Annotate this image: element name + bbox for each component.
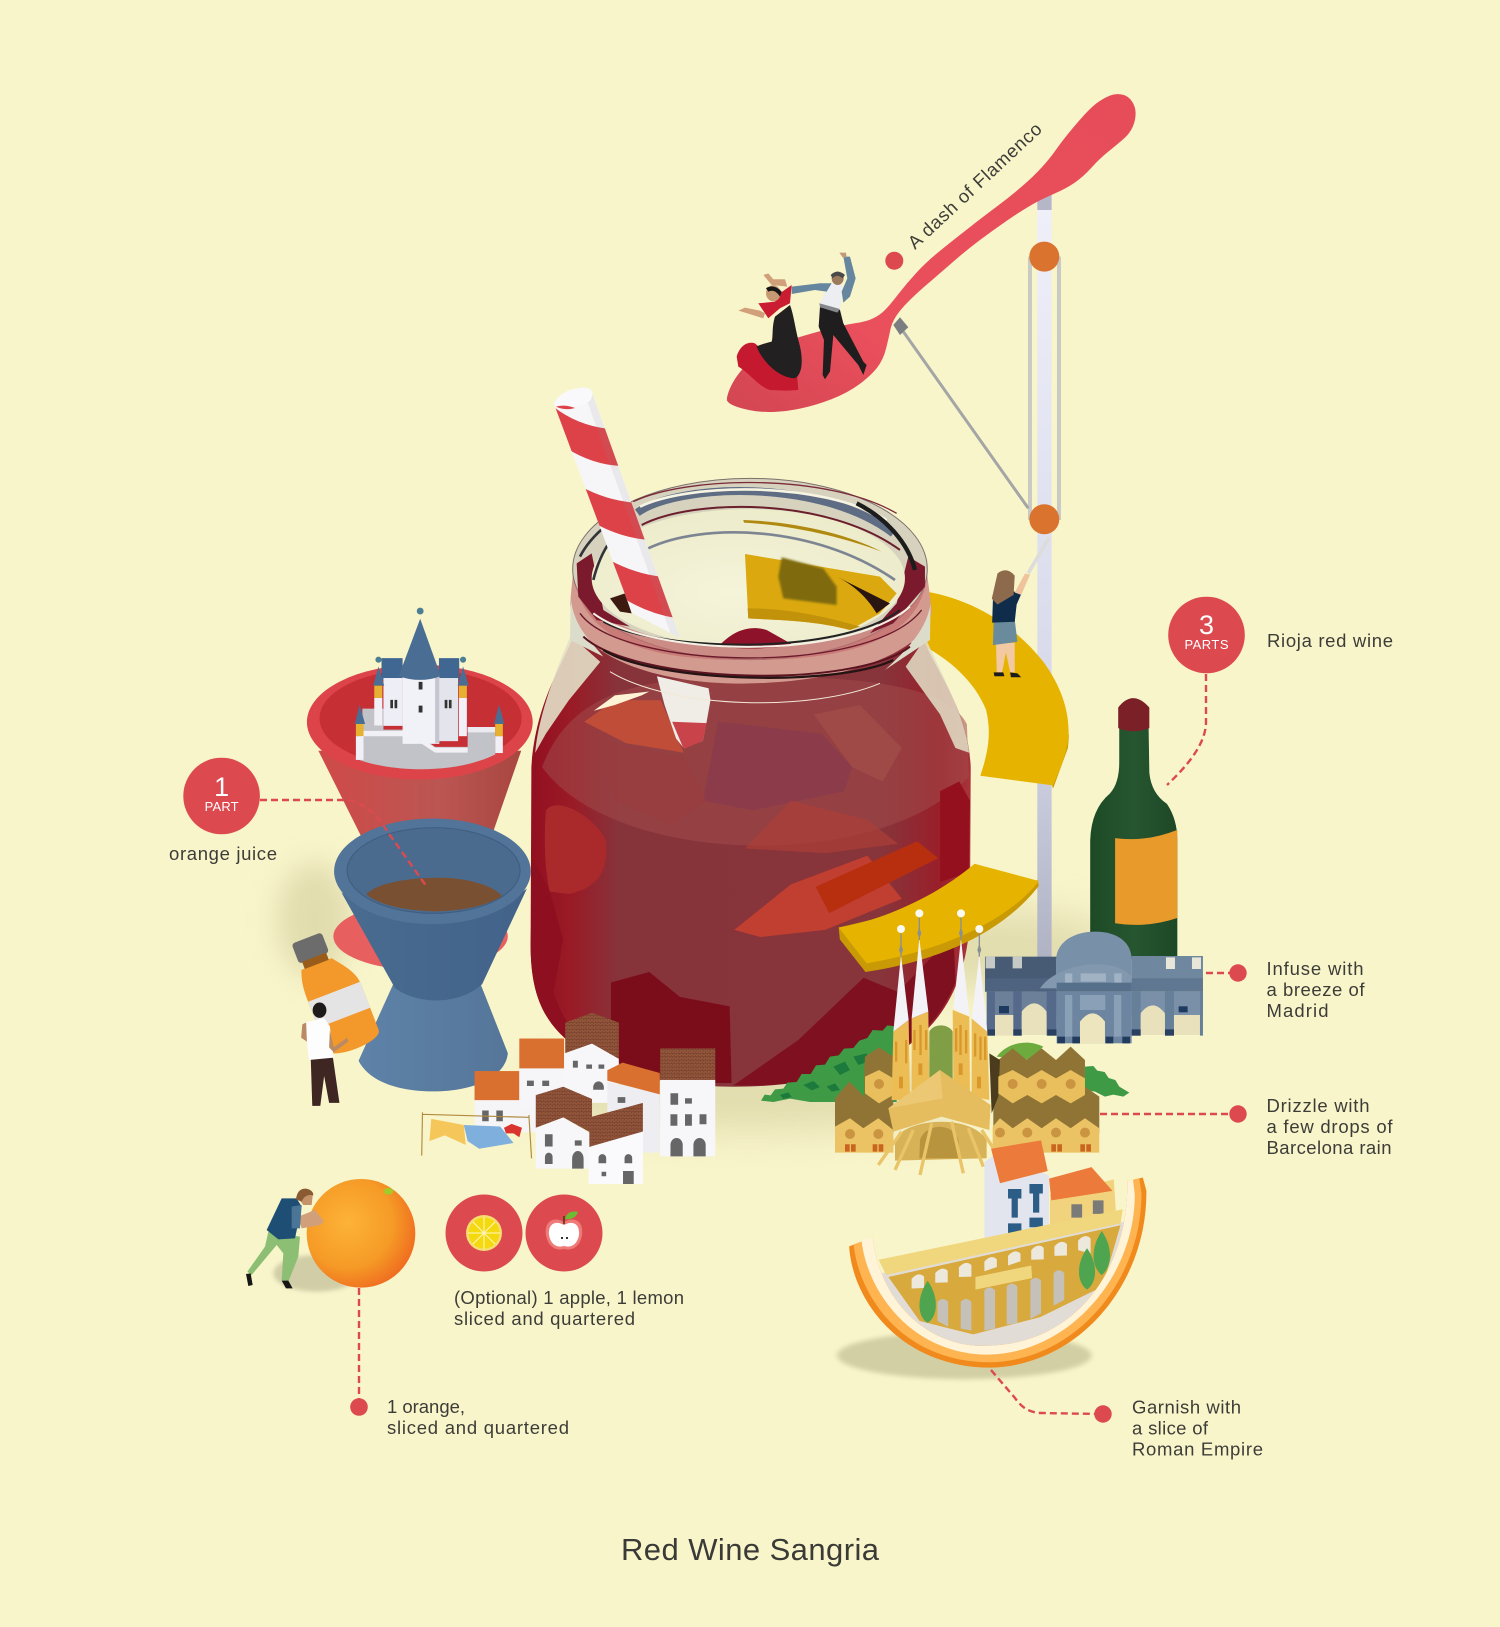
right wing brown xyxy=(993,1047,1099,1133)
tall house roof xyxy=(991,1140,1048,1183)
text: sliced and quartered xyxy=(387,1417,569,1438)
marker xyxy=(1094,1405,1112,1423)
soft ground shadows xyxy=(277,862,1120,1131)
yellow reflection xyxy=(745,554,897,630)
garnish callout xyxy=(991,1370,1263,1460)
right trees xyxy=(1079,1231,1110,1290)
top xyxy=(992,591,1021,623)
jigger base flare xyxy=(333,903,508,970)
jigger cone xyxy=(318,751,521,850)
aqueduct body xyxy=(888,1225,1121,1334)
fruit chunk xyxy=(596,738,707,825)
rim inner xyxy=(347,828,520,913)
portal dark xyxy=(919,1127,960,1158)
drizzle callout xyxy=(1100,1095,1393,1158)
apple leaf xyxy=(565,1212,578,1219)
sleeve xyxy=(292,1205,302,1228)
orange slice peel xyxy=(594,692,649,711)
glass shoulder reflection left xyxy=(535,636,600,753)
left pillar feet xyxy=(987,1029,1057,1036)
house front right body xyxy=(589,1132,643,1184)
top lip outer xyxy=(573,478,927,660)
icon disc xyxy=(526,1194,602,1272)
rim grey line xyxy=(648,532,895,580)
yellow house xyxy=(1050,1179,1116,1229)
mouth lower edge dark xyxy=(603,610,900,645)
number: 3 xyxy=(1199,610,1214,640)
rim dark red line xyxy=(642,507,900,550)
castle xyxy=(355,608,504,769)
orange slice floating xyxy=(584,700,684,753)
3 parts connector xyxy=(1167,674,1206,785)
orange juice label: orange juice xyxy=(169,843,277,864)
towers xyxy=(892,1010,989,1100)
man legs xyxy=(311,1058,339,1106)
rim outline top xyxy=(633,483,897,513)
bottle glass xyxy=(1090,700,1177,960)
left bush xyxy=(761,1025,897,1102)
roof back xyxy=(519,1039,564,1068)
right wing band xyxy=(1132,978,1203,992)
unit: PART xyxy=(205,799,239,814)
shoulder highlight xyxy=(610,672,880,703)
pith xyxy=(862,1180,1135,1355)
house far left xyxy=(475,1100,538,1132)
orange callout xyxy=(350,1288,569,1438)
dark reflection xyxy=(837,577,890,613)
lip front pink band xyxy=(575,583,926,660)
spire stems xyxy=(899,917,981,957)
striped straw xyxy=(554,388,680,638)
tall blue house xyxy=(984,1153,1049,1239)
rim outer xyxy=(334,818,531,924)
left pillars xyxy=(987,992,1057,1036)
label: 1 part xyxy=(183,758,260,834)
straw white body xyxy=(554,394,680,638)
man torso xyxy=(267,1198,302,1239)
legs xyxy=(996,643,1015,672)
text: Barcelona rain xyxy=(1266,1137,1392,1158)
liquid upper tint xyxy=(542,676,969,846)
dome front arch xyxy=(1040,964,1132,988)
left wing crenels xyxy=(986,957,1022,968)
right upper gold band xyxy=(998,1070,1085,1103)
house mid roof xyxy=(607,1063,660,1094)
icon disc xyxy=(446,1194,522,1272)
left dark chunk xyxy=(531,858,615,1069)
center cornice xyxy=(1057,983,1132,992)
title: Red Wine Sangria xyxy=(621,1532,880,1567)
windows xyxy=(482,1061,706,1184)
badge xyxy=(1168,597,1245,673)
sagrada familia xyxy=(761,909,1129,1175)
man arm xyxy=(298,1210,324,1228)
strut clamp xyxy=(893,317,908,335)
center arch xyxy=(1080,1013,1105,1043)
center strips xyxy=(1065,995,1121,1037)
right dark gap xyxy=(989,1053,1000,1113)
woman with pole stick on the ring xyxy=(992,537,1049,677)
house tile tall roof xyxy=(565,1013,619,1059)
lower ridge dark line xyxy=(583,637,910,676)
number: 1 xyxy=(214,772,229,802)
man head xyxy=(313,1003,326,1018)
text: a breeze of xyxy=(1266,979,1365,1000)
spoon with flamenco dancers xyxy=(727,94,1136,412)
flamenco label: A dash of Flamenco xyxy=(903,118,1046,253)
right pillars xyxy=(1132,992,1203,1036)
yellow house roof xyxy=(1049,1167,1112,1200)
orange stem xyxy=(383,1188,393,1195)
apple flesh xyxy=(549,1223,579,1247)
connector xyxy=(358,1288,360,1400)
lower groove xyxy=(603,650,893,678)
text: a few drops of xyxy=(1266,1116,1393,1137)
man arm xyxy=(301,1022,348,1052)
orange wedge xyxy=(734,856,902,937)
gold thin reflection xyxy=(743,520,882,552)
center block xyxy=(1057,992,1132,1043)
main pole upper xyxy=(1037,193,1052,1007)
left wing top xyxy=(985,957,1057,992)
juice bottle xyxy=(287,926,382,1059)
facade top facet xyxy=(888,1070,943,1108)
left lip reflection xyxy=(577,553,630,627)
man hair xyxy=(296,1189,313,1202)
wing windows xyxy=(845,1144,1091,1152)
yellow house windows xyxy=(1071,1200,1104,1218)
facade xyxy=(888,1070,991,1132)
lemon flesh xyxy=(468,1218,500,1248)
apple icon xyxy=(526,1194,602,1272)
lemon segments xyxy=(468,1217,500,1249)
house front left body xyxy=(536,1117,590,1169)
apple stem xyxy=(563,1216,565,1224)
glass shoulder reflection right xyxy=(906,638,969,753)
left upper band xyxy=(865,1070,893,1103)
lower ridge light xyxy=(570,597,931,670)
right pillar feet xyxy=(1132,1029,1174,1036)
interior ground xyxy=(882,1221,1125,1347)
slice shadow xyxy=(837,1332,1091,1379)
juice xyxy=(366,878,502,911)
side rails xyxy=(1028,257,1061,520)
aqueduct mid beam xyxy=(975,1265,1032,1290)
orange and pushing person xyxy=(246,1179,415,1292)
upper cone xyxy=(341,889,527,1000)
dark patch xyxy=(778,557,837,605)
left lower wing brown xyxy=(835,1047,893,1133)
connector xyxy=(991,1370,1098,1414)
apple skin xyxy=(546,1220,582,1249)
white village xyxy=(422,1013,715,1184)
straw opening xyxy=(554,388,592,407)
strut xyxy=(903,332,1028,508)
text: Infuse with xyxy=(1266,958,1364,979)
spires xyxy=(893,938,987,1032)
left rim stripes xyxy=(580,525,610,580)
rioja label: Rioja red wine xyxy=(1267,630,1393,651)
text: a slice of xyxy=(1132,1418,1209,1438)
right window xyxy=(1179,1006,1188,1012)
bottle label xyxy=(1115,830,1177,925)
house front left roof xyxy=(536,1087,592,1133)
man dancer xyxy=(792,253,867,379)
lemon icon xyxy=(446,1194,522,1272)
arm xyxy=(1015,573,1030,595)
text: Madrid xyxy=(1266,1000,1328,1021)
right wing openings xyxy=(1141,1005,1200,1035)
tower stripes xyxy=(895,1025,986,1088)
house right body xyxy=(660,1080,715,1156)
marker xyxy=(350,1398,368,1416)
optional fruit label: (Optional) 1 apple, 1 lemon xyxy=(454,1287,684,1308)
green tower xyxy=(929,1025,953,1080)
left wing band xyxy=(985,978,1057,992)
glass jar of sangria xyxy=(531,380,971,1087)
house tile tall body xyxy=(564,1043,619,1103)
left wing lower infill xyxy=(995,992,1057,1015)
label: 3 parts xyxy=(1168,597,1245,673)
house mid body xyxy=(607,1082,660,1153)
ring seen through glass xyxy=(816,841,938,913)
left window xyxy=(999,1006,1009,1013)
stick xyxy=(1028,537,1049,573)
left lower gold xyxy=(835,1118,893,1153)
rim dark right xyxy=(857,503,915,570)
spire tips xyxy=(897,909,983,933)
aqueduct top beam xyxy=(879,1209,1123,1275)
top right bush xyxy=(997,1043,1043,1060)
marker xyxy=(1229,964,1247,982)
right side shading xyxy=(585,392,680,638)
shoes xyxy=(994,672,1021,677)
attic windows xyxy=(1065,973,1122,983)
roman orange slice xyxy=(837,1140,1146,1379)
man shoes xyxy=(246,1273,293,1288)
woman dancer xyxy=(737,273,802,391)
house front right roof xyxy=(589,1103,643,1147)
straw stripes group xyxy=(554,394,680,638)
fruit chunk xyxy=(814,705,902,782)
left inner dark reflection xyxy=(610,593,632,613)
yellow reflection edge xyxy=(748,608,860,630)
optional fruit label: sliced and quartered xyxy=(454,1308,635,1329)
front rim groove lines xyxy=(580,607,922,703)
lower ridge xyxy=(570,570,932,684)
red bit in opening xyxy=(556,406,575,409)
skirt xyxy=(993,620,1017,645)
hair xyxy=(992,570,1015,604)
text: Drizzle with xyxy=(1266,1095,1370,1116)
jar body and contents xyxy=(531,636,971,1087)
infuse callout xyxy=(1206,958,1365,1021)
yellow ring lower arc xyxy=(839,864,1039,972)
flamenco marker xyxy=(885,252,903,270)
jar neck lower lip xyxy=(570,478,932,684)
spoon xyxy=(727,94,1136,412)
house back xyxy=(519,1068,565,1107)
pole shadow under spoon xyxy=(1037,195,1052,210)
rim top band xyxy=(637,491,893,533)
ice chunk xyxy=(703,722,852,810)
right dark chunk xyxy=(940,782,970,882)
connector xyxy=(1100,1113,1232,1115)
text: Garnish with xyxy=(1132,1396,1241,1418)
dome xyxy=(1056,932,1132,987)
lip bottom line xyxy=(580,610,922,658)
lower cone xyxy=(359,980,508,1091)
submerged roofs xyxy=(611,972,732,1083)
portal dome xyxy=(895,1122,987,1161)
cherry xyxy=(718,628,793,648)
left bush shade xyxy=(780,1053,868,1099)
straw refracted through glass xyxy=(657,676,710,748)
mouth floor xyxy=(592,509,905,648)
wine bottle xyxy=(1090,698,1177,960)
apple seeds xyxy=(561,1237,568,1239)
right bush xyxy=(1085,1066,1129,1097)
red stripes xyxy=(553,407,677,618)
clothes line xyxy=(422,1112,532,1158)
tall house windows xyxy=(1008,1184,1043,1233)
unit: PARTS xyxy=(1184,637,1229,652)
right wing top xyxy=(1132,956,1203,991)
yellow ring upper arc xyxy=(917,590,1069,789)
person carrying juice bottle xyxy=(287,926,382,1106)
straw red lower part xyxy=(672,722,707,749)
right lip reflection xyxy=(870,557,925,633)
ring edge xyxy=(1051,734,1069,789)
1 part dashed connector xyxy=(260,800,427,887)
upper pivot xyxy=(1029,242,1059,272)
bottom dark zone xyxy=(733,935,955,1086)
ring top xyxy=(839,864,1039,963)
columns xyxy=(878,1122,993,1175)
ring edge xyxy=(839,880,1039,972)
blue jigger with juice xyxy=(334,818,531,1091)
man legs xyxy=(247,1232,300,1282)
rim outer xyxy=(307,665,533,779)
man head xyxy=(297,1189,313,1205)
bottle capsule xyxy=(1118,698,1149,731)
roof far left xyxy=(475,1071,519,1100)
peel light xyxy=(854,1178,1141,1362)
puerta de alcala gate xyxy=(985,932,1203,1043)
red jigger with castle xyxy=(307,608,533,970)
marker xyxy=(1229,1105,1247,1123)
left apple piece xyxy=(545,805,606,894)
man shirt xyxy=(305,1018,334,1060)
badge xyxy=(183,758,260,834)
text: 1 orange, xyxy=(387,1396,465,1417)
peel xyxy=(849,1177,1146,1368)
pole with rails and spoon strut xyxy=(893,193,1061,1007)
lemon rind xyxy=(466,1215,502,1251)
right wing crenels xyxy=(1166,957,1201,969)
rim inner xyxy=(320,669,522,767)
orange fruit xyxy=(307,1179,415,1288)
right lower gold xyxy=(993,1118,1099,1153)
text: Roman Empire xyxy=(1132,1438,1263,1460)
fruit chunk xyxy=(745,801,898,853)
shadow xyxy=(273,1255,360,1292)
left tree xyxy=(919,1281,936,1323)
right wing lower infill xyxy=(1132,992,1203,1015)
center feet xyxy=(1057,1037,1130,1043)
left wing openings xyxy=(995,1003,1047,1036)
ring top xyxy=(917,590,1069,785)
aqueduct lower arches xyxy=(937,1270,1064,1331)
wing ornaments xyxy=(845,1079,1090,1139)
lower pivot xyxy=(1029,504,1059,534)
rim white highlight xyxy=(640,489,887,520)
mouth lower edge highlight xyxy=(593,607,910,647)
connector xyxy=(1206,972,1232,974)
aqueduct upper arches xyxy=(912,1236,1091,1288)
jar body xyxy=(531,638,971,1087)
house right roof xyxy=(660,1048,715,1080)
